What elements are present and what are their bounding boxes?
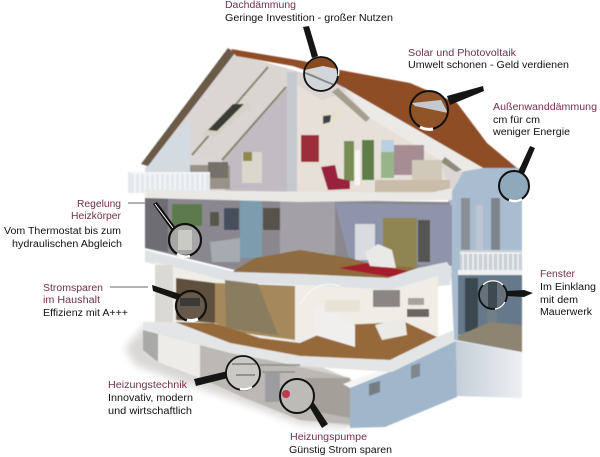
attic interior (145, 52, 463, 195)
callout: Heizungstechnik: Innovativ, modern (108, 393, 193, 404)
callout: Außenwanddämmung (492, 102, 597, 138)
callout: Solar und Photovoltaik (408, 48, 569, 71)
callout: Stromsparen im Haushalt: Stromsparen (43, 283, 103, 294)
balcony (458, 250, 522, 275)
callout: Fenster: mit dem (540, 295, 578, 306)
callout: Dachdämmung (225, 0, 393, 24)
callout: Regelung Heizkörper: Heizkörper (71, 211, 122, 222)
lower slab (143, 322, 454, 372)
arch (300, 284, 340, 305)
attic furniture (190, 162, 450, 192)
callout: Dachdämmung: Geringe Investition - großer Nutzen (225, 13, 393, 24)
callout: Außenwanddämmung: weniger Energie (492, 127, 570, 138)
house illustration (125, 48, 522, 428)
armchair (321, 165, 350, 190)
sofa (314, 300, 407, 347)
callout: Regelung Heizkörper (4, 199, 145, 250)
right facade (447, 168, 522, 352)
lower window bay (458, 275, 522, 335)
callout: Solar und Photovoltaik: Solar und Photovoltaik (408, 48, 517, 59)
callout: Stromsparen im Haushalt: im Haushalt (43, 295, 100, 306)
left gable glazing (146, 118, 190, 190)
wall art (301, 135, 319, 162)
upper floor wood (232, 250, 418, 278)
roof rafter (141, 48, 235, 166)
callout: Stromsparen im Haushalt (43, 283, 148, 319)
callout: Heizungspumpe: Günstig Strom sparen (289, 445, 392, 456)
roof tiles (231, 49, 517, 168)
dormer window (322, 110, 343, 131)
callout: Fenster: Im Einklang (540, 282, 596, 293)
callout: Regelung Heizkörper: Regelung (77, 199, 121, 210)
exterior blue wall basement (456, 341, 522, 398)
callout: Fenster: Fenster (540, 269, 576, 280)
magnifier: exterior wall (499, 146, 535, 201)
attic windows (344, 140, 442, 185)
basement pipes (238, 360, 300, 378)
magnifier: saving electricity (152, 285, 206, 321)
sloped ceiling and skylight (192, 67, 287, 192)
magnifier: window (479, 281, 533, 309)
callout: Regelung Heizkörper: Vom Thermostat bis zum (4, 226, 121, 237)
callout: Außenwanddämmung: cm für cm (493, 115, 540, 126)
callout: Heizungspumpe (289, 432, 392, 456)
upper floor room (145, 198, 450, 272)
callout: Solar und Photovoltaik: Umwelt schonen - Geld verdienen (408, 60, 569, 71)
callout: Stromsparen im Haushalt: Effizienz mit A+++ (43, 308, 128, 319)
white armchair (365, 244, 396, 268)
callout: Dachdämmung: Dachdämmung (225, 0, 296, 11)
magnifier: heating control (153, 202, 201, 257)
ground floor wood (175, 322, 437, 360)
red rug (338, 263, 413, 277)
callout: Heizungstechnik: Heizungstechnik (108, 380, 188, 391)
callout: Heizungstechnik: und wirtschaftlich (108, 406, 192, 417)
callout: Außenwanddämmung: Außenwanddämmung (493, 102, 597, 113)
magnifier: heating technology (194, 356, 260, 390)
basement soft base (125, 325, 352, 428)
callout: Fenster (540, 269, 596, 318)
callout: Heizungstechnik (108, 380, 193, 417)
roof eave (343, 87, 483, 172)
callout: Heizungspumpe: Heizungspumpe (290, 432, 367, 443)
magnifier: roof insulation (303, 26, 339, 91)
ground floor room (155, 262, 438, 368)
attic balcony rail (128, 172, 210, 193)
magnifier: heat pump (280, 379, 328, 428)
magnifier: solar (410, 86, 484, 129)
callout: Fenster: Mauerwerk (540, 307, 593, 318)
callout: Regelung Heizkörper: hydraulischen Abgleich (12, 239, 122, 250)
middle slab (145, 250, 452, 290)
slab under attic (145, 188, 452, 202)
